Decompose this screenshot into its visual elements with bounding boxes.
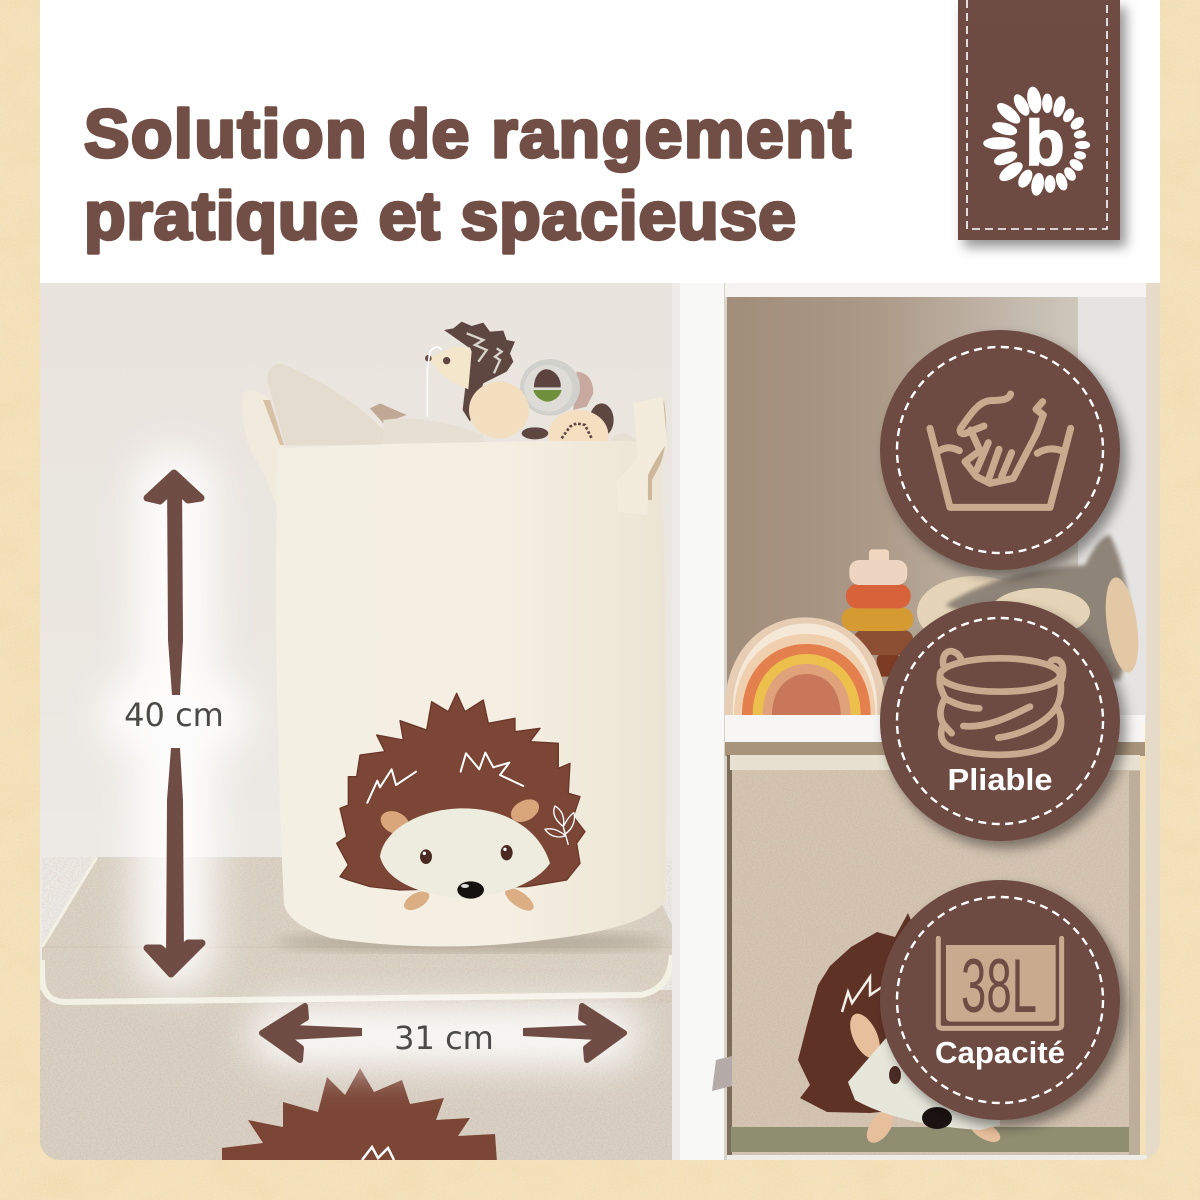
left basket handle — [263, 400, 284, 445]
label: Capacité: Capacité — [935, 1035, 1065, 1070]
label: 40 cm: 40 cm — [124, 696, 224, 734]
basket shadow — [275, 932, 665, 952]
title: pratique et spacieuse — [84, 178, 796, 254]
rainbow toy — [725, 617, 886, 715]
hedgehog on left box — [222, 1068, 497, 1162]
plush toy — [917, 535, 1144, 680]
knitted pillow — [267, 363, 383, 445]
panel: product photo — [40, 283, 1160, 1162]
middle white shelf — [725, 715, 1145, 756]
basket — [276, 441, 666, 946]
hedgehog on basket — [337, 693, 585, 915]
right basket handle — [633, 398, 666, 500]
wooden hedgehog — [444, 322, 515, 422]
icon: folded basket — [940, 651, 1063, 755]
left width arrow — [262, 1006, 362, 1060]
toys in basket — [268, 322, 636, 445]
storage box on the left — [40, 857, 680, 1160]
left wall — [40, 283, 680, 1013]
arrow: width dimension — [262, 1006, 624, 1060]
label: 38L: 38L — [961, 944, 1037, 1029]
wooden stacking toy — [842, 549, 913, 677]
right storage box — [727, 755, 1147, 1160]
right side wall — [1078, 283, 1160, 1160]
label: 31 cm: 31 cm — [394, 1019, 494, 1057]
logo tab — [958, 0, 1120, 240]
badge: washable — [880, 330, 1120, 570]
right niche back wall — [727, 297, 1082, 722]
right width arrow — [523, 1006, 624, 1060]
white header band — [40, 0, 1160, 300]
disc toys — [573, 372, 593, 410]
icon: hand wash — [930, 394, 1071, 507]
upper height arrow — [147, 473, 201, 695]
badge: capacity — [880, 880, 1120, 1120]
lower height arrow — [147, 748, 202, 974]
glow behind dimensions — [100, 450, 640, 1065]
title: Solution de rangement — [84, 96, 851, 172]
badge: foldable — [880, 601, 1120, 841]
hedgehog on right box — [798, 913, 1004, 1147]
arrow: height dimension — [147, 473, 202, 974]
logo letter: b — [1025, 107, 1065, 179]
top white shelf — [725, 283, 1160, 297]
icon: capacity container — [938, 938, 1062, 1028]
fabric tag — [712, 1056, 732, 1091]
logo mark — [984, 86, 1089, 196]
white shelf column — [672, 283, 727, 1160]
label: Pliable: Pliable — [948, 762, 1052, 797]
title — [84, 96, 851, 254]
